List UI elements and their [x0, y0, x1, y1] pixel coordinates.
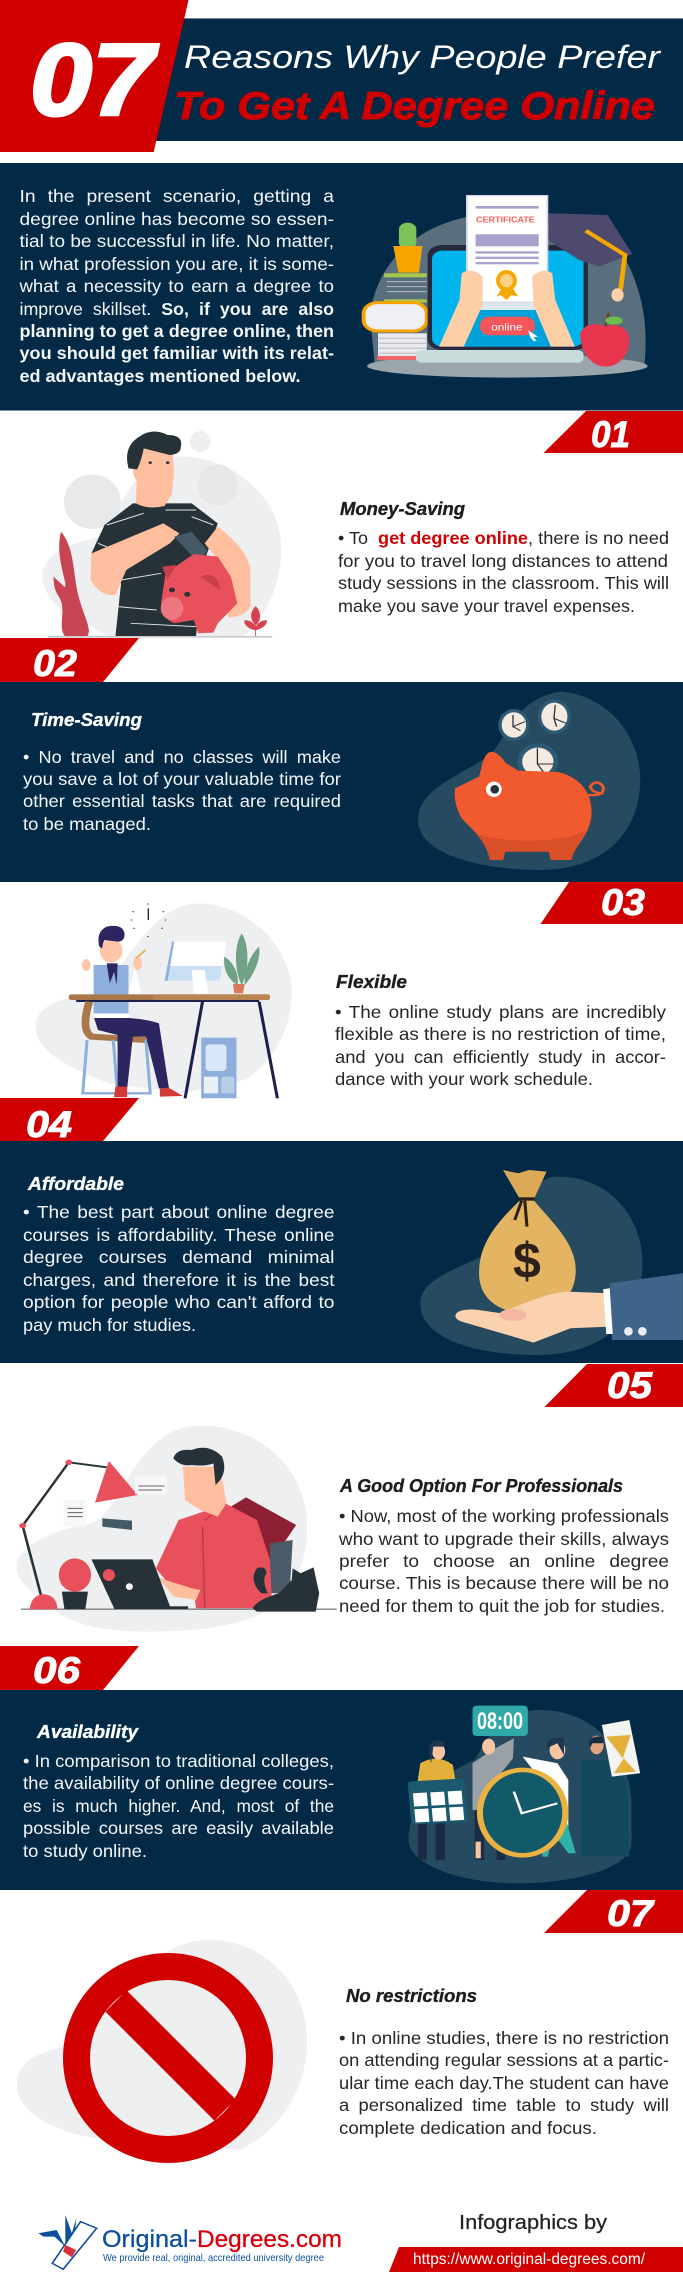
text: money-saving body: study sessions in the classroom. This will [338, 573, 669, 593]
number 02: 02 [33, 643, 77, 684]
text: availability body: to study online. [23, 1841, 147, 1861]
intro text block [18, 186, 334, 386]
tab 06 [0, 1646, 139, 1690]
illustration: money bag on hand [420, 1170, 683, 1355]
icon: diploma scroll logo [38, 2215, 97, 2269]
illustration: man with piggy bank [43, 431, 281, 638]
text: professionals body: who want to upgrade their skills, always [338, 1529, 669, 1549]
tab 02 [0, 638, 139, 682]
panel: 03 flexible [36, 882, 683, 1098]
header banner [0, 0, 683, 152]
logo wordmark: Original- [102, 2226, 197, 2253]
logo tagline: We provide real, original, accredited university degree [103, 2252, 324, 2264]
text: affordable body [23, 1202, 335, 1335]
tab 05 [544, 1364, 683, 1407]
text: flexible body [335, 1002, 666, 1089]
text: no restrictions body [339, 2028, 669, 2138]
illustration: certificate on laptop: online [491, 322, 523, 333]
intro text block: tial to be successful in life. No matter, [20, 231, 334, 251]
text: professionals body: prefer to choose an online degree [339, 1551, 669, 1571]
url ribbon [389, 2247, 683, 2272]
title line 2: To Get A Degree Online [174, 85, 655, 128]
tab 04 [0, 1098, 139, 1141]
text: professionals body: • Now, most of the working professionals [339, 1506, 669, 1526]
intro text block: ed advantages mentioned below. [20, 366, 300, 386]
heading: Time-Saving: Time-Saving [31, 710, 142, 730]
intro text block: in what profession you are, it is some- [20, 254, 334, 274]
text: affordable body: • The best part about online degree [23, 1202, 334, 1222]
text: time-saving body: to be managed. [23, 814, 151, 834]
intro text block: degree online has become so essen- [20, 209, 334, 229]
text: availability body: • In comparison to traditional colleges, [23, 1751, 334, 1771]
text: flexible body: flexible as there is no restriction of time, [335, 1024, 666, 1044]
icon: dollar sign: $ [513, 1233, 541, 1289]
credit label: Infographics by [459, 2212, 607, 2234]
text: flexible body: and you can efficiently study in accor- [335, 1047, 666, 1067]
intro text block: you should get familiar with its relat- [20, 343, 334, 363]
panel: 01 money-saving [43, 411, 683, 638]
number 06: 06 [33, 1650, 80, 1691]
text: time-saving body [23, 747, 341, 834]
footer: logo: Degrees.com [197, 2226, 342, 2253]
number 03: 03 [601, 882, 645, 923]
number 04: 04 [26, 1104, 72, 1145]
big number 07: 07 [30, 23, 159, 137]
text: money-saving body: • To [338, 528, 368, 548]
intro text block: what a necessity to earn a degree to [18, 276, 334, 296]
illustration: certificate on laptop [364, 196, 648, 378]
heading: No restrictions: No restrictions [346, 1986, 477, 2006]
number 07: 07 [607, 1893, 656, 1934]
text: availability body [23, 1751, 334, 1861]
tab 07 [544, 1890, 683, 1933]
title line 1: Reasons Why People Prefer [184, 39, 662, 75]
text: money-saving body: , there is no need [528, 528, 669, 548]
illustration: man working on laptop [17, 1426, 337, 1632]
intro text block: planning to get a degree online, then [20, 321, 334, 341]
text: time-saving body: • No travel and no classes will make [23, 747, 341, 767]
panel: 04 affordable [0, 1098, 683, 1363]
illustration: student at desk [36, 903, 292, 1098]
text: availability body: possible courses are easily available [23, 1818, 334, 1838]
text: money-saving body: get degree online [378, 528, 528, 548]
heading: Money-Saving: Money-Saving [340, 499, 465, 519]
heading: Flexible: Flexible [336, 972, 407, 992]
panel: 05 professionals [17, 1364, 683, 1632]
intro text block: improve skillset. So, if you are also [20, 299, 334, 319]
number 01: 01 [591, 414, 630, 455]
text: time-saving body: you save a lot of your valuable time for [23, 769, 341, 789]
text: affordable body: pay much for studies. [23, 1315, 196, 1335]
text: no restrictions body: a personalized time table to study will [339, 2095, 669, 2115]
heading: Affordable: Affordable [27, 1174, 124, 1194]
text: flexible body: dance with your work schedule. [335, 1069, 593, 1089]
illustration: certificate on laptop: CERTIFICATE [476, 215, 535, 224]
panel: 07 no restrictions [17, 1890, 683, 2150]
tab 01 [544, 411, 683, 453]
number 05: 05 [607, 1365, 654, 1406]
panel: introduction [0, 163, 683, 411]
text: professionals body: course. This is because there will be no [339, 1573, 669, 1593]
text: no restrictions body: complete dedication and focus. [339, 2118, 597, 2138]
illustration: orange piggy bank with clocks [418, 692, 640, 870]
text: money-saving body: for you to travel long distances to attend [338, 551, 668, 571]
footer: credit [389, 2212, 683, 2272]
text: professionals body [338, 1506, 669, 1616]
text: time-saving body: other essential tasks that are required [23, 791, 341, 811]
text: professionals body: need for them to quit the job for studies. [339, 1596, 665, 1616]
text: no restrictions body: on attending regular sessions at a partic- [339, 2050, 669, 2070]
heading: A Good Option For Professionals: A Good Option For Professionals [339, 1476, 623, 1496]
text: availability body: the availability of online degree cours- [23, 1773, 334, 1793]
text: affordable body: charges, and therefore it is the best [23, 1270, 335, 1290]
clock display: 08:00 [477, 1708, 523, 1735]
illustration: people around a clock [407, 1706, 640, 1883]
text: affordable body: courses is affordability. These online [23, 1225, 334, 1245]
red number block [0, 0, 188, 152]
text: money-saving body: make you save your travel expenses. [338, 596, 635, 616]
text: affordable body: option for people who can't afford to [23, 1292, 334, 1312]
text: money-saving body [338, 528, 669, 616]
illustration: prohibition sign [17, 1940, 307, 2150]
footer: logo [38, 2215, 342, 2269]
text: no restrictions body: • In online studies, there is no restriction [339, 2028, 669, 2048]
panel: 06 availability [0, 1646, 683, 1890]
text: no restrictions body: ular time each day.The student can have [339, 2073, 669, 2093]
panel: 02 time-saving [0, 638, 683, 882]
url text: https://www.original-degrees.com/ [413, 2251, 646, 2268]
text: affordable body: degree courses demand minimal [23, 1247, 334, 1267]
text: availability body: es is much higher. And, most of the [23, 1796, 334, 1816]
intro text block: In the present scenario, getting a [20, 186, 334, 206]
heading: Availability: Availability [36, 1722, 139, 1742]
text: flexible body: • The online study plans are incredibly [335, 1002, 666, 1022]
tab 03 [540, 882, 683, 924]
